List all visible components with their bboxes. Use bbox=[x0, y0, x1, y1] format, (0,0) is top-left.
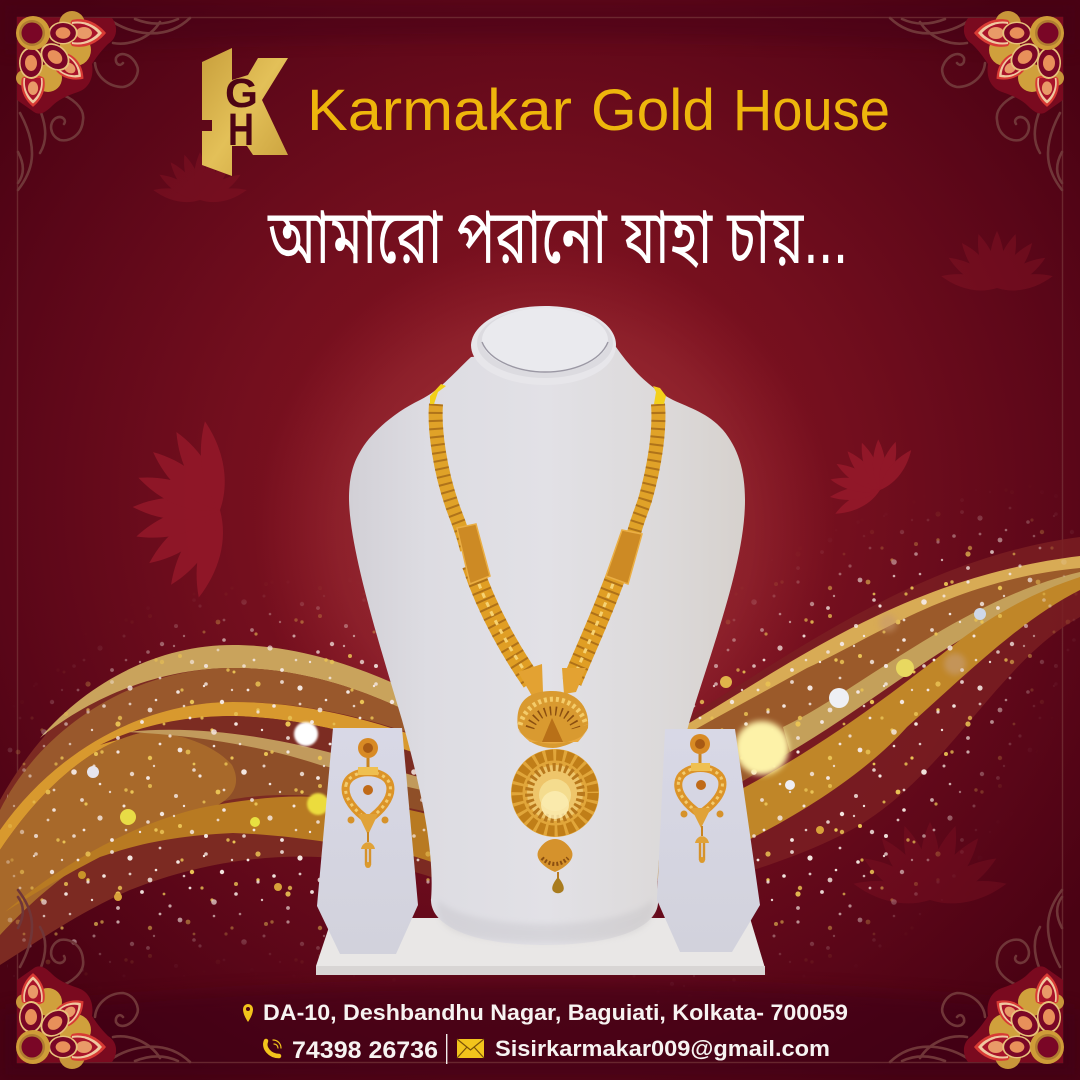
right gold ribbon bbox=[640, 537, 1080, 905]
brand name bbox=[307, 78, 890, 143]
icon: location pin bbox=[243, 1004, 253, 1022]
necklace bust bbox=[349, 306, 745, 945]
left earring stand bbox=[317, 728, 418, 954]
lotus: upper right bbox=[940, 231, 1054, 295]
left earring bbox=[346, 738, 390, 868]
right earring stand bbox=[657, 729, 760, 952]
bust neck bbox=[471, 306, 616, 385]
pendant disc bbox=[511, 749, 599, 837]
logo letters GH bbox=[225, 70, 258, 155]
necklace left strand bbox=[430, 384, 543, 696]
ornament: top right bbox=[890, 11, 1064, 190]
lotus: lower right faint bbox=[852, 822, 1008, 909]
left gold ribbon bbox=[0, 645, 440, 965]
logo letters GH: H bbox=[228, 104, 254, 155]
pendant bbox=[511, 691, 599, 893]
contact: phone and email line bbox=[265, 1034, 830, 1064]
icon: envelope bbox=[457, 1039, 484, 1058]
brand name: Karmakar bbox=[307, 78, 572, 143]
ornament: top left bbox=[16, 11, 190, 190]
lotus: upper left faint bbox=[152, 152, 248, 206]
phone number: 74398 26736 bbox=[292, 1037, 438, 1064]
contact: address line: DA-10, Deshbandhu Nagar, Baguiati, Kolkata- 700059 bbox=[263, 1000, 848, 1025]
pendant fan bbox=[517, 691, 588, 748]
Bengali tagline: আমারো পরানো যাহা চায়... bbox=[267, 195, 848, 280]
lotus: large left bbox=[129, 417, 234, 601]
divider bbox=[446, 1034, 447, 1064]
brand name: House bbox=[733, 78, 890, 143]
logo letters GH: G bbox=[225, 70, 258, 116]
pendant lower drop bbox=[538, 839, 572, 893]
particle field bbox=[6, 500, 1078, 984]
bust body bbox=[349, 347, 745, 945]
long gold necklace bbox=[430, 384, 666, 893]
bokeh highlights bbox=[78, 608, 986, 901]
brand name: Gold bbox=[591, 78, 715, 143]
right earring bbox=[678, 734, 724, 863]
ornament: bottom right bbox=[890, 890, 1064, 1069]
ornament: bottom left bbox=[16, 890, 190, 1069]
icon: phone bbox=[265, 1040, 281, 1056]
lotus: right middle bbox=[809, 419, 923, 527]
email address: Sisirkarmakar009@gmail.com bbox=[495, 1036, 830, 1061]
necklace right strand bbox=[562, 386, 666, 694]
marble base bbox=[316, 918, 765, 975]
background lotus flowers bbox=[129, 152, 1054, 909]
logo: KGH mark bbox=[202, 48, 288, 176]
